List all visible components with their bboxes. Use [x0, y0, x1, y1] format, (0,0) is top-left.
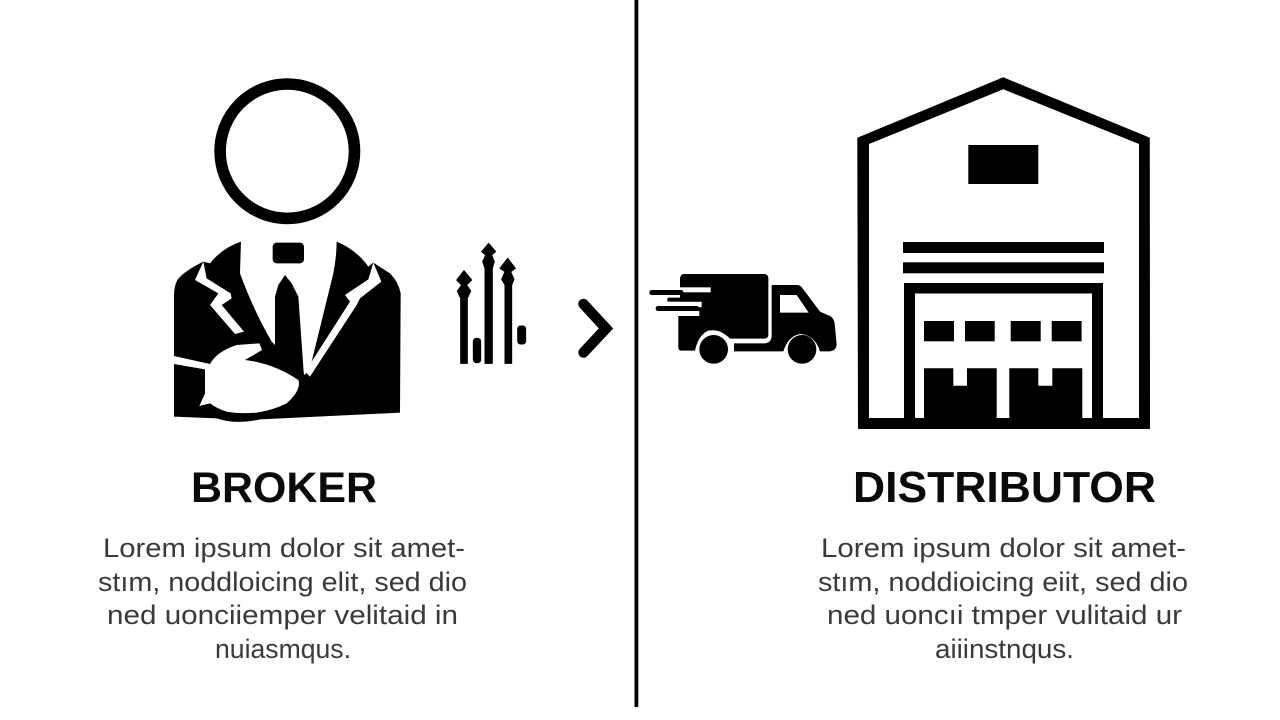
door windows	[924, 321, 1082, 341]
panel: distributor	[818, 77, 1188, 664]
text block: broker description: stım, noddloicing elit, sed dio	[98, 567, 467, 597]
warehouse outline	[857, 77, 1150, 429]
text block: broker description	[98, 533, 467, 664]
text block: distributor description: ned uoncıi tmper vulitaid ur	[827, 600, 1182, 630]
warehouse sign	[968, 145, 1038, 184]
icon: warehouse	[857, 77, 1150, 429]
heading: broker: BROKER	[191, 464, 377, 512]
arrow: chevron right	[584, 304, 606, 352]
warehouse roller stripes	[903, 242, 1104, 273]
person head ring	[220, 84, 354, 218]
panel: broker	[98, 84, 467, 664]
text block: broker description: ned uonciiemper velitaid in	[107, 600, 458, 630]
heading: distributor: DISTRIBUTOR	[853, 463, 1156, 512]
warehouse door frame	[904, 283, 1103, 423]
text block: broker description: nuiasmqus.	[215, 634, 351, 664]
icon: rising arrows chart	[457, 243, 526, 363]
text block: distributor description	[818, 533, 1188, 664]
text block: distributor description: stım, noddioicing eiit, sed dio	[818, 567, 1188, 597]
icon: broker person	[174, 84, 401, 422]
person suit with handshake hand	[174, 240, 401, 422]
icon: delivery truck	[649, 274, 837, 364]
center divider line	[634, 0, 638, 707]
text block: broker description: Lorem ipsum dolor sit amet-	[103, 533, 465, 563]
text block: distributor description: Lorem ipsum dolor sit amet-	[821, 533, 1186, 563]
text block: distributor description: aiiinstnqus.	[935, 634, 1074, 664]
stacked boxes	[924, 368, 1082, 420]
